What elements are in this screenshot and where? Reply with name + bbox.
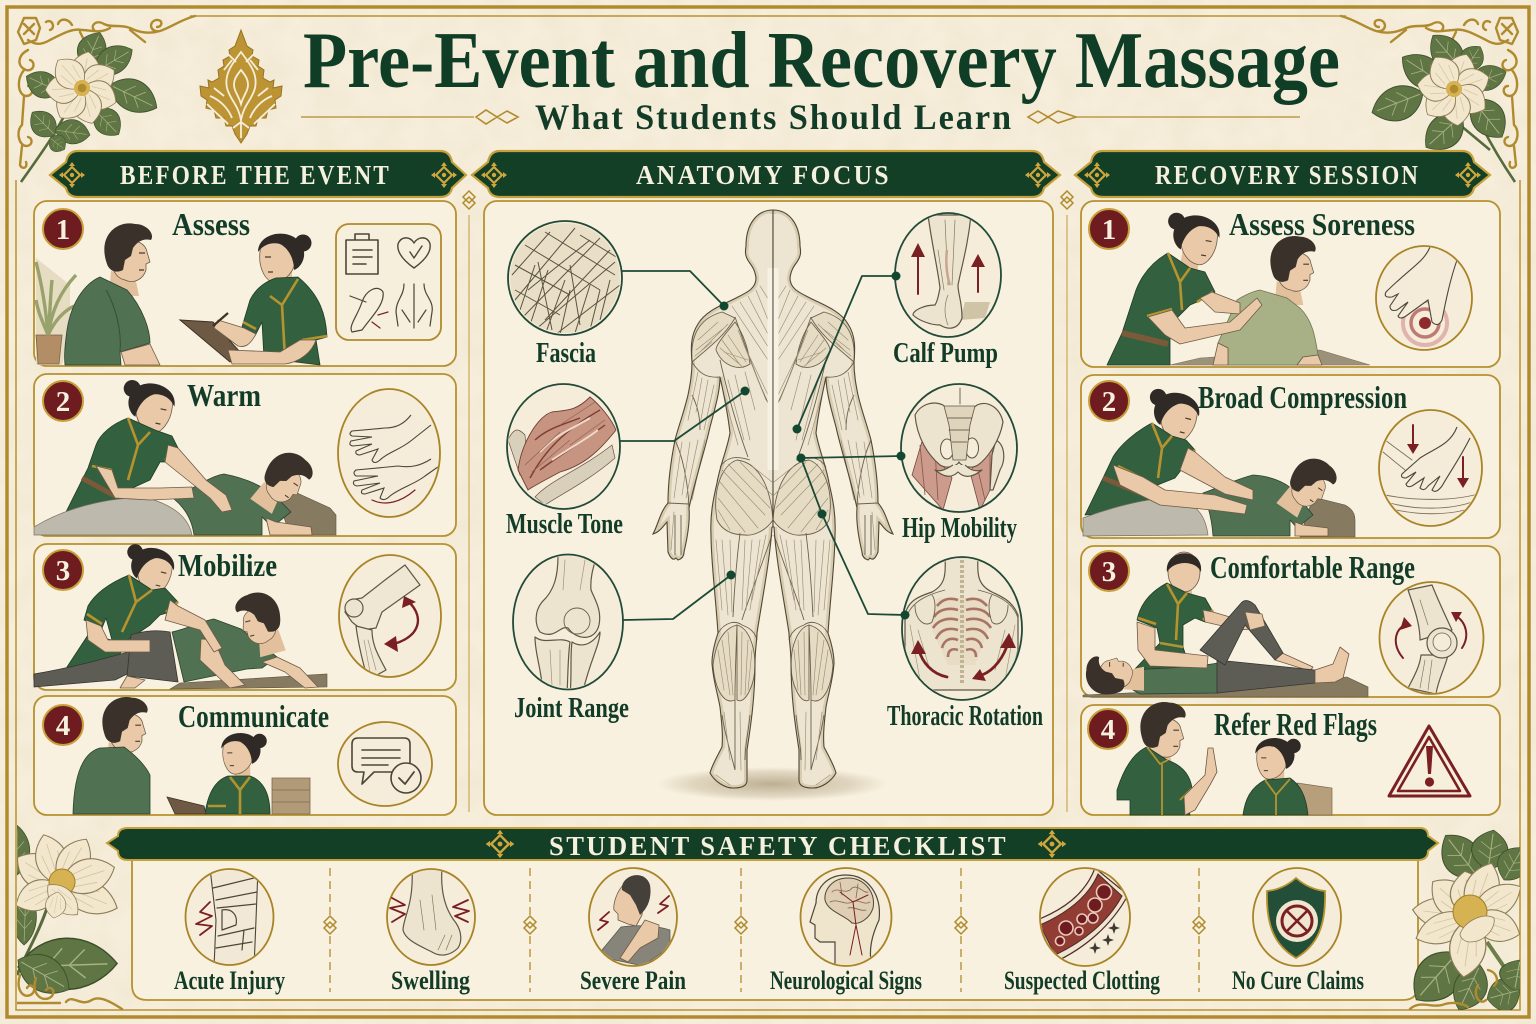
plant <box>36 258 76 365</box>
item: acute injury <box>174 868 285 995</box>
step badge 3 <box>1089 551 1129 591</box>
banner: anatomy focus: ANATOMY FOCUS <box>636 160 891 190</box>
panel: right 1 assess soreness <box>1081 201 1500 367</box>
heading: broad compression: Broad Compression <box>1198 379 1407 415</box>
step badge 2: 2 <box>1102 386 1116 418</box>
massage scene: mobilize <box>34 542 327 689</box>
flower: bottom left <box>17 825 124 1010</box>
label: neurological signs: Neurological Signs <box>770 966 922 995</box>
scene: broad compression <box>1083 386 1355 537</box>
heading: refer red flags: Refer Red Flags <box>1214 706 1377 742</box>
medallion: muscle tone <box>507 384 620 509</box>
banner: student safety checklist: STUDENT SAFETY CHECKLIST <box>549 831 1008 861</box>
step badge 2: 2 <box>56 386 70 418</box>
medallion: warming hands <box>338 389 445 517</box>
item: swelling <box>387 868 475 995</box>
client seated back view <box>65 223 160 365</box>
corner ornament: top left <box>18 16 195 168</box>
step badge 3: 3 <box>56 555 70 587</box>
step badge 4: 4 <box>56 710 70 742</box>
banner: recovery session <box>1075 151 1490 197</box>
label: calf pump: Calf Pump <box>893 338 998 369</box>
banner: before the event <box>50 151 466 197</box>
step badge 1: 1 <box>56 214 70 246</box>
medallion: hip mobility <box>901 384 1017 512</box>
medallion: knee range <box>1380 582 1484 694</box>
flower: bottom right <box>1408 830 1520 1010</box>
flower: top left <box>21 27 164 182</box>
step badge 3 <box>43 550 83 590</box>
leader lines <box>620 271 905 620</box>
medallion: thoracic rotation <box>902 557 1022 700</box>
medallion: calf pump <box>895 213 1001 337</box>
therapist with clipboard <box>180 234 327 365</box>
massage scene: warm <box>34 378 336 535</box>
panel: anatomy focus <box>484 201 1053 815</box>
gold thai flame emblem <box>200 30 282 143</box>
medallion: speech bubble with check <box>338 722 432 806</box>
heading: assess soreness: Assess Soreness <box>1229 206 1415 242</box>
banner: before the event: BEFORE THE EVENT <box>120 160 391 190</box>
label: thoracic rotation: Thoracic Rotation <box>887 701 1043 732</box>
banner: student safety checklist <box>107 828 1438 861</box>
panel: left 3 mobilize <box>34 542 456 690</box>
scene: referral conversation <box>1117 702 1332 815</box>
icon: warning triangle <box>1389 726 1470 796</box>
step badge 3: 3 <box>1102 556 1116 588</box>
step badge 1 <box>1089 209 1129 249</box>
label: no cure claims: No Cure Claims <box>1232 966 1364 995</box>
subtitle divider <box>301 110 1300 124</box>
flower: top right <box>1366 26 1515 182</box>
scene: leg mobilisation <box>1083 552 1368 697</box>
panel: right 3 comfortable range <box>1081 546 1500 697</box>
heading: warm: Warm <box>187 377 261 413</box>
item: no cure claims <box>1232 868 1364 995</box>
back-view anatomy figure <box>653 210 893 788</box>
label: acute injury: Acute Injury <box>174 966 285 995</box>
corner ornament: top right <box>1341 16 1518 168</box>
medallion: soreness point <box>1376 246 1472 350</box>
step badge 4: 4 <box>1101 714 1115 746</box>
panel: left 1 assess <box>34 201 456 366</box>
panel: right 2 broad compression <box>1081 375 1500 538</box>
column dividers <box>463 191 1073 812</box>
label: fascia: Fascia <box>536 338 596 369</box>
medallion connection dots <box>892 272 910 620</box>
label: suspected clotting: Suspected Clotting <box>1004 966 1160 995</box>
panel: student safety checklist <box>107 828 1438 1000</box>
item: neurological signs <box>770 868 922 995</box>
conversation scene <box>73 697 310 814</box>
medallion: compression hand <box>1379 410 1482 526</box>
banner: anatomy focus <box>472 151 1060 197</box>
step badge 2 <box>43 381 83 421</box>
step badge 1 <box>43 209 83 249</box>
checklist dividers <box>324 868 1205 992</box>
icon box: assessment icons <box>336 224 441 340</box>
medallion: joint range <box>513 554 623 695</box>
item: suspected clotting <box>1004 868 1160 995</box>
label: muscle tone: Muscle Tone <box>506 509 623 540</box>
heading: communicate: Communicate <box>178 698 329 734</box>
step badge 4 <box>43 705 83 745</box>
step badge 1: 1 <box>1102 214 1116 246</box>
label: swelling: Swelling <box>391 966 470 995</box>
panel: left 2 warm <box>34 374 456 536</box>
label: severe pain: Severe Pain <box>580 966 686 995</box>
panel: right 4 refer red flags <box>1081 702 1500 815</box>
label: joint range: Joint Range <box>514 693 629 724</box>
heading: comfortable range: Comfortable Range <box>1210 549 1415 585</box>
banner: recovery session: RECOVERY SESSION <box>1155 160 1420 190</box>
item: severe pain <box>580 868 686 995</box>
title: Pre-Event and Recovery Massage <box>303 17 1340 105</box>
heading: assess: Assess <box>172 206 250 242</box>
leader dots <box>720 302 826 580</box>
subtitle: What Students Should Learn <box>535 97 1013 137</box>
floor shadow <box>657 767 887 801</box>
heading: mobilize: Mobilize <box>178 547 277 583</box>
label: hip mobility: Hip Mobility <box>902 513 1017 544</box>
panel: left 4 communicate <box>34 696 456 815</box>
scene: therapist palpating shoulder <box>1107 210 1370 365</box>
step badge 2 <box>1089 381 1129 421</box>
medallion: knee rotation <box>339 555 441 680</box>
medallion: fascia <box>508 221 622 335</box>
step badge 4 <box>1088 709 1128 749</box>
